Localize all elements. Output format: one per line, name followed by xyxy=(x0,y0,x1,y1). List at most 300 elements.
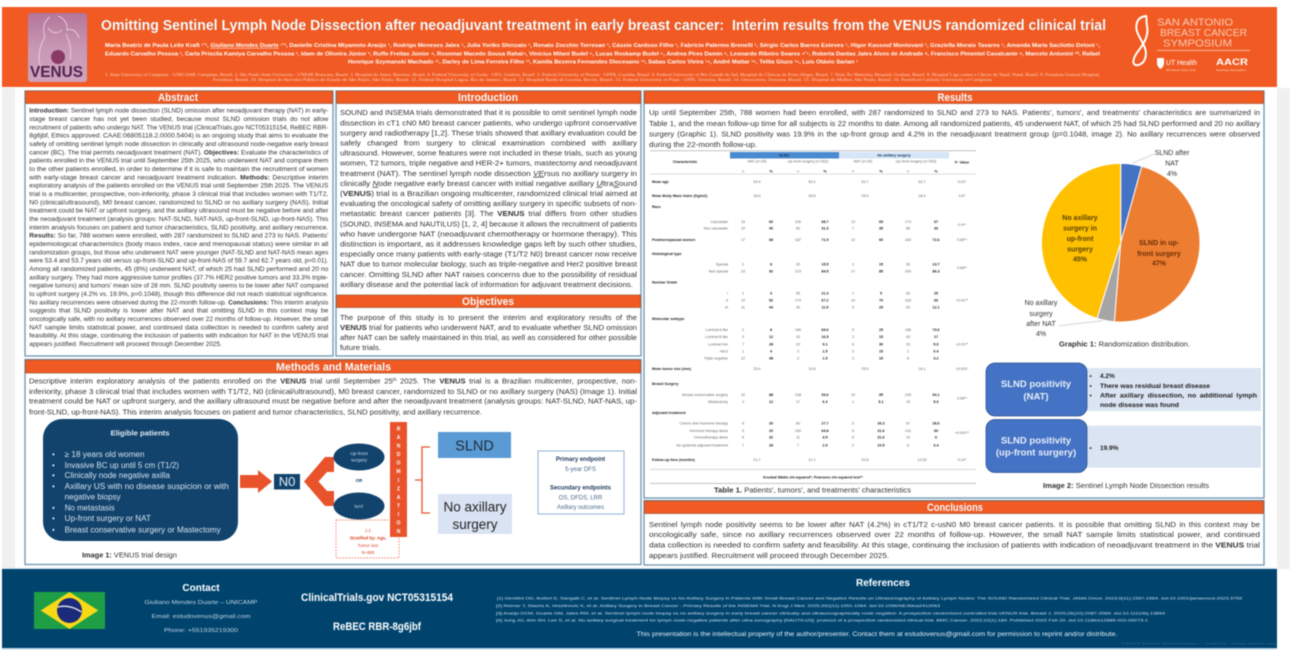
table 1: patient characteristics: 28.8 xyxy=(808,194,816,198)
table 1: patient characteristics: 13.53 xyxy=(917,458,927,462)
table 1: patient characteristics: 12.1 xyxy=(932,306,940,310)
text block: methods: th xyxy=(393,377,397,382)
table 1: patient characteristics: No axillary surgery xyxy=(877,154,912,158)
endpoints box: Primary endpoint xyxy=(556,457,605,463)
pie label: SLND in up-front surgery: front surgery xyxy=(1137,251,1181,258)
table 1: patient characteristics: 10 xyxy=(741,227,745,231)
text block: abstract: cancer (BC). The trial permits neoadjuvant treatment (NAT). Objectives: Evaluate the characteristics of xyxy=(29,149,329,156)
text block: methods: Descriptive interim exploratory analysis of the patients enrolled on the VENUS trial until September 25 xyxy=(29,377,392,386)
table 1: patient characteristics: 15 xyxy=(879,349,883,353)
pie label: no axillary surgery in up-front surgery: up-front xyxy=(1067,236,1094,243)
table 1: patient characteristics: 17 xyxy=(851,269,855,273)
text block: conclusions: data collection is needed to confirm safety and feasibility. At this stage, continuing the inclusion of patients with indication of neoadjuvant treatment in the VENUS trial xyxy=(649,540,1260,550)
table 1: patient characteristics: 53.4 xyxy=(753,180,761,184)
text block: methods: treatment could be NAT or upfront surgery, and the axillary ultrasound must be negative before and after the neoadjuvant treatment (analysis groups: NAT-SLND, NAT-NAS, up- xyxy=(29,397,638,406)
text block: results: during the 22-month follow-up. xyxy=(649,140,757,149)
table 1: patient characteristics: % xyxy=(879,170,883,174)
arm: no axillary surgery: No axillary xyxy=(443,500,507,514)
contact block: Contact xyxy=(182,583,220,594)
eligible patients box: • xyxy=(52,461,55,470)
table 1: patient characteristics: 5 xyxy=(852,306,854,310)
table 1: patient characteristics: 0.14* xyxy=(958,458,967,462)
ellipse: up-front surgery: surgery xyxy=(351,458,368,464)
panel: conclusions xyxy=(644,500,1264,565)
pie label: no axillary surgery in up-front surgery: 45% xyxy=(1073,256,1088,264)
table 1: patient characteristics: 32 xyxy=(769,436,773,440)
text block: abstract: with early-stage breast cancer and neoadjuvant treatment indication. Methods: Descriptive interim xyxy=(28,174,328,181)
logo: VENUS trial xyxy=(28,13,87,82)
table 1: patient characteristics: 31.6 xyxy=(877,436,885,440)
table 1: patient characteristics: 85 xyxy=(879,269,883,273)
table 1: patient characteristics: 20 xyxy=(769,422,773,426)
table 1: patient characteristics: 173 xyxy=(905,220,911,224)
text block: abstract: exploratory analysis of the patients enrolled on the VENUS trial until September 25th 2025. The VENUS xyxy=(29,183,328,190)
logo: San Antonio Breast Cancer Symposium: MD Anderson Cancer Center xyxy=(1166,68,1196,72)
pie label: no axillary surgery in up-front surgery: surgery in xyxy=(1063,226,1097,232)
table 1: patient characteristics: 3.2 xyxy=(933,357,939,361)
SLND positivity after NAT: • xyxy=(1090,383,1092,390)
pie label: no axillary surgery after NAT: 4% xyxy=(1036,331,1046,338)
text block: abstract: Results: So far, 788 women were enrolled, with 287 randomized to SLND and 273 to NAS. Patients' xyxy=(29,233,328,240)
table 1: patient characteristics: Histological type xyxy=(652,252,682,256)
references: This presentation is the intellectual property of the author/presenter. Contact them at estudovenus@gmail.com for permission to reprint and/or distribute. xyxy=(636,632,1118,638)
logo: VENUS trial: VENUS xyxy=(30,64,83,81)
table 1: patient characteristics: 6 xyxy=(852,342,854,346)
table 1: patient characteristics: 35 xyxy=(879,227,883,231)
arm: no axillary surgery xyxy=(438,494,512,534)
table 1: patient characteristics: 67 xyxy=(934,220,938,224)
table 1: patient characteristics: 20.8 xyxy=(861,458,869,462)
table 1: patient characteristics: <0.001** xyxy=(955,431,970,435)
table 1: patient characteristics: 9.1 xyxy=(822,342,828,346)
heading: conclusions: Conclusions xyxy=(927,502,983,514)
table 1: patient characteristics: Caucasian xyxy=(711,220,728,224)
table 1: patient characteristics: <0.001* xyxy=(956,367,969,371)
table 1: patient characteristics: 5.9 xyxy=(933,400,939,404)
eligible patients box: Up-front surgery or NAT xyxy=(65,514,151,523)
text block: conclusions: appears justified. Recruitment will proceed through December 2025. xyxy=(649,551,889,560)
endpoints box: 5-year DFS xyxy=(565,467,596,473)
text block: introduction: dissection in cT1 cN0 M0 breast cancer patients, who undergo upfront conservative xyxy=(340,118,637,127)
table 1: patient characteristics: 65 xyxy=(879,220,883,224)
table 1: patient characteristics: 28.6 xyxy=(932,422,940,426)
table 1: patient characteristics: 29 xyxy=(906,306,910,310)
text block: abstract: No axillary recurrences were observed during the 22-month follow-up. Conclusions: This interim analysis xyxy=(29,299,328,306)
table 1: patient characteristics: Adjuvant treatment xyxy=(652,411,686,415)
header band xyxy=(2,7,1277,87)
table 1: patient characteristics: 6 xyxy=(935,436,937,440)
randomization bar: T xyxy=(397,503,400,509)
text block: objectives xyxy=(340,313,637,352)
table 1: patient characteristics: 4 xyxy=(770,349,773,353)
text block: introduction: distinction is important, as it addresses knowledge gaps left by such other studies, xyxy=(340,240,637,248)
text block: introduction: ultrasound. However, some features were not included in these trials, such as young xyxy=(340,149,637,158)
endpoints box: Axillary outcomes xyxy=(557,505,604,511)
randomization bar: O xyxy=(397,520,401,526)
text block: introduction: axillary disease and the potential lack of information for adjuvant treatment decisions. xyxy=(340,280,633,289)
SLND positivity after up-front surgery: 19.9% xyxy=(1100,445,1119,452)
contact block xyxy=(144,583,258,634)
table 1: patient characteristics: Mean tumor size (mm) xyxy=(652,367,692,371)
table 1: patient characteristics: 8 xyxy=(907,443,909,447)
authors: Henrique Szymanski Machado ¹¹, Darley de Lima Ferreira Filho ¹², Kamila Bezerra Fernandes Diocesano ¹³, Sabas Carlos Vieira ¹⁴, André Mattar ¹⁵, Telita Giuzo ¹⁶, Luís Otávio Sarian ¹ xyxy=(348,60,858,66)
table 1: patient characteristics: 86.3 xyxy=(932,269,940,273)
ellipse: up-front surgery: Up-front xyxy=(350,451,368,457)
table 1: patient characteristics: 174 xyxy=(795,299,801,303)
table 1: patient characteristics: 14 xyxy=(906,436,910,440)
caption: graphic 1: Graphic 1: Randomization distribution. xyxy=(1059,340,1190,348)
pie label: SLND in up-front surgery xyxy=(1137,240,1181,268)
references: [1] Gentilini OD, Botteri E, Sangalli C, et al. Sentinel Lymph Node Biopsy vs No Axillary Surgery in Patients With Small Breast Cancer and Negative Results on Ultrasonography of Axillary Lymph Nodes: The SOUND Randomized Clinical Trial. JAMA Oncol. 2023;9(11):1557-1564. doi:10.1001/jamaoncol.2023.3759 xyxy=(497,596,1243,600)
table 1: patient characteristics: Mean age xyxy=(652,180,669,184)
table 1: patient characteristics: 71.9 xyxy=(821,238,829,242)
table 1: patient characteristics: 68 xyxy=(769,238,773,242)
SLND positivity after NAT xyxy=(986,363,1261,416)
table 1: patient characteristics: 15 xyxy=(879,357,883,361)
text block: abstract: Introduction: Sentinel lymph node dissection (SLND) omission after neoadjuvant therapy (NAT) in early- xyxy=(29,108,328,115)
table 1: patient characteristics: 0.68** xyxy=(957,396,968,400)
logo: San Antonio Breast Cancer Symposium: American Association xyxy=(1216,68,1246,72)
table 1: patient characteristics: % xyxy=(934,170,938,174)
table 1: patient characteristics: Up-front surgery (n=253) xyxy=(896,160,936,164)
pie label: SLND after NAT xyxy=(1155,150,1190,178)
table 1: patient characteristics: 6 xyxy=(852,436,854,440)
table 1: patient characteristics: 15 xyxy=(741,220,745,224)
text block: results: Table 1, and the mean follow-up time for all subjects is 22 months to date. Among all randomized patients, 45 underwent NAT, of which 25 had SLND performed and 20 no axillary xyxy=(649,119,1260,128)
title: Omitting Sentinel Lymph Node Dissection after neoadjuvant treatment in early breast cancer: Interim results from the VENUS randomized clinical trial xyxy=(101,18,1106,34)
contact block: Email: estudovenus@gmail.com xyxy=(152,614,251,620)
table 1: patient characteristics: 1.5 xyxy=(822,357,828,361)
SLND positivity after up-front surgery: (up-front surgery) xyxy=(996,448,1076,459)
table 1: patient characteristics: 28.9 xyxy=(753,194,761,198)
eligible patients box: Invasive BC up until 5 cm (T1/2) xyxy=(65,461,179,470)
table 1: patient characteristics: 5 xyxy=(742,429,744,433)
heading: abstract: Abstract xyxy=(158,92,198,104)
table 1: patient characteristics: 13.7 xyxy=(932,263,940,267)
table 1: patient characteristics: 25 xyxy=(879,328,883,332)
pie label: no axillary surgery in up-front surgery: No axillary xyxy=(1062,215,1098,222)
table 1: patient characteristics: 7 xyxy=(742,443,744,447)
SLND positivity after up-front surgery xyxy=(986,420,1261,472)
text block: abstract: stage breast cancer has not yet been studied, because most SLND omission trials do not allow xyxy=(29,116,329,123)
randomization bar: I xyxy=(398,478,400,484)
text block: introduction: clinically Node negative early breast cancer with initial negative axillary UltraSound xyxy=(340,179,637,188)
text block: abstract: to upfront surgery (4.2% vs. 19.9%, p=0.1048), though this difference did not reach statistical significance. xyxy=(29,291,329,298)
table 1: patient characteristics: Race xyxy=(652,205,661,209)
table 1: patient characteristics: 5 xyxy=(852,422,854,426)
table 1: patient characteristics: 141 xyxy=(905,429,911,433)
endpoints box: Secundary endpoints xyxy=(550,486,612,492)
table 1: patient characteristics: 0.68** xyxy=(957,266,968,270)
pie label: no axillary surgery after NAT: No axillary xyxy=(1025,300,1058,307)
table 1: patient characteristics: Triple negative xyxy=(704,357,728,361)
pie label: no axillary surgery in up-front surgery xyxy=(1062,215,1098,264)
arm: SLND: SLND xyxy=(455,438,494,454)
SLND positivity after NAT: (NAT) xyxy=(1023,392,1049,402)
table 1: patient characteristics: Breast Surgery xyxy=(652,382,679,386)
stratification box: Tumor size xyxy=(357,543,379,548)
text block: conclusions: oncologically safe, since no axillary recurrences observed over 22 months of follow-up. However, the small NAT sample limits statistical power, and continued xyxy=(649,530,1260,539)
randomization bar: M xyxy=(396,469,401,475)
eligible patients box: Clinically node negative axilla xyxy=(65,471,171,480)
N0 box xyxy=(274,474,300,490)
table 1: patient characteristics: 82 xyxy=(796,227,800,231)
table 1: patient characteristics: 4 xyxy=(770,292,773,296)
table 1: patient characteristics: 3.4 xyxy=(933,443,940,447)
text block: abstract: epidemiological characteristics (body mass index, race and menopausal status) were similar in all xyxy=(29,241,328,248)
table 1: patient characteristics: 33 xyxy=(796,263,800,267)
logo: San Antonio Breast Cancer Symposium: SAN ANTONIO xyxy=(1157,18,1233,28)
logo: San Antonio Breast Cancer Symposium: BREAST CANCER xyxy=(1160,28,1247,39)
text block: introduction: safely changed from surgery to clinical examination combined with axillary xyxy=(340,138,637,148)
caption: image 1: Image 1: VENUS trial design xyxy=(82,552,177,560)
table 1: patient characteristics: 55 xyxy=(796,292,800,296)
affiliations xyxy=(105,72,1100,83)
table 1: patient characteristics: 3 xyxy=(852,349,854,353)
randomization bar: D xyxy=(397,452,401,458)
stratification box xyxy=(336,520,399,558)
table 1: patient characteristics: 94.1 xyxy=(932,393,940,397)
randomization bar: R xyxy=(397,426,401,432)
eligible patients box: No metastasis xyxy=(65,504,115,512)
table 1: patient characteristics: 1 xyxy=(852,292,854,296)
table 1: patient characteristics: Chemo and Hormone therapy xyxy=(679,422,728,426)
pie label: no axillary surgery in up-front surgery: surgery xyxy=(1067,246,1093,254)
table 1: patient characteristics: 0.65** xyxy=(957,238,968,242)
table 1: patient characteristics: 72.6 xyxy=(932,238,940,242)
table 1: patient characteristics: I xyxy=(727,292,728,296)
text block: methods: VENUS trial is a Brazilian multicenter, prospective, non- xyxy=(439,377,635,386)
caption: table 1: Table 1. Patients', tumors', and treatments' characteristics xyxy=(714,486,911,494)
table 1: patient characteristics: Her2 xyxy=(720,349,728,353)
SLND positivity after NAT: There was residual breast disease xyxy=(1100,383,1210,390)
logo: San Antonio Breast Cancer Symposium: UT Health xyxy=(1166,58,1197,67)
table 1: patient characteristics: 17 xyxy=(934,335,938,339)
table 1: patient characteristics: 7 xyxy=(742,342,744,346)
pie label: SLND after NAT: 4% xyxy=(1167,171,1177,178)
text block: introduction: who have undergone NAT (neoadjuvant chemotherapy or hormone therapy). This xyxy=(339,229,637,238)
table 1: patient characteristics: 1 xyxy=(907,349,909,353)
randomization bar: A xyxy=(397,435,401,441)
text block: objectives: The purpose of this study is to present the interim and exploratory results of the xyxy=(340,313,637,322)
table 1: patient characteristics: 60 xyxy=(934,429,938,433)
heading: introduction: Introduction xyxy=(458,92,518,104)
text block: abstract: safety of omitting sentinel lymph node dissection in clinically and ultrasound node-negative early breast xyxy=(29,141,329,148)
references: [2] Reimer T, Stachs A, Veselinovic K, et al. Axillary Surgery in Breast Cancer - Primary Results of the INSEMA Trial. N Engl J Med. 2025;392(11):1051-1064. doi:10.1056/NEJMoa2412063 xyxy=(496,603,941,608)
table 1: patient characteristics: 163 xyxy=(905,299,911,303)
table 1: patient characteristics: 0.8* xyxy=(959,194,966,198)
text block: introduction: (VENUS ) trial is a Brazilian ongoing multicenter, randomized clinical trial aimed at xyxy=(340,189,638,198)
table 1: patient characteristics: 100 xyxy=(795,220,801,224)
eligible patients box: • xyxy=(52,482,55,491)
table 1: patient characteristics: 25.4 xyxy=(753,367,761,371)
eligible patients box: • xyxy=(52,514,55,523)
stratification box: 1:1 xyxy=(365,528,372,533)
table 1: patient characteristics: 4.5 xyxy=(822,436,828,440)
table 1: patient characteristics: 35 xyxy=(906,263,910,267)
table 1: patient characteristics: 43 xyxy=(906,335,910,339)
table 1: patient characteristics: 5.1 xyxy=(878,400,884,404)
text block: abstract: treatment could be NAT or upfront surgery, and the axillary ultrasound must be negative before and after xyxy=(29,208,328,215)
table 1: patient characteristics: 16.5 xyxy=(821,335,829,339)
table 1: patient characteristics: 25.5 xyxy=(861,367,869,371)
authors xyxy=(105,43,1101,66)
table 1: patient characteristics: 17 xyxy=(741,238,745,242)
text block: abstract: Among all randomized patients, 45 (8%) underwent NAT, of which 25 had SLND performed and 20 no xyxy=(29,266,329,273)
table 1: patient characteristics: 13 xyxy=(851,220,855,224)
table 1: patient characteristics: Non special xyxy=(709,269,728,273)
heading: objectives: Objectives xyxy=(462,296,514,308)
table 1: patient characteristics: 1 xyxy=(852,400,854,404)
table 1: patient characteristics: 16.1 xyxy=(918,367,926,371)
table 1: patient characteristics: 10.5 xyxy=(877,443,885,447)
randomization bar: Z xyxy=(397,486,400,492)
table 1: patient characteristics: 2.9 xyxy=(822,443,828,447)
SLND positivity after NAT: • xyxy=(1090,392,1092,399)
table 1: patient characteristics: 28 xyxy=(769,342,773,346)
pie label: no axillary surgery after NAT: surgery xyxy=(1029,311,1053,318)
N0 box: N0 xyxy=(279,474,295,489)
table 1: patient characteristics: Luminal B like xyxy=(705,335,728,339)
table 1: patient characteristics: 1.5 xyxy=(822,349,828,353)
table 1: patient characteristics: 3 xyxy=(852,263,854,267)
table 1: patient characteristics: 8 xyxy=(907,357,909,361)
eligible patients box: Eligible patients xyxy=(110,428,170,438)
text block: introduction: metastatic breast cancer patients [3]. The VENUS trial differs from other studies xyxy=(340,209,637,218)
table 1: patient characteristics: III xyxy=(725,306,728,310)
text block: abstract: suggests that SLND positivity is lower after NAT and that omitting SLND in this context may be xyxy=(29,308,329,315)
table 1: patient characteristics: 28.9 xyxy=(861,194,869,198)
table 1: patient characteristics: n xyxy=(797,170,799,174)
text block: abstract: the neoadjuvant treatment (analysis groups: NAT-SLND, NAT-NAS, up-front-SLND, up-front-NAS). This xyxy=(29,216,328,223)
table 1: patient characteristics: Special xyxy=(716,263,728,267)
table 1: patient characteristics: 23 xyxy=(741,269,745,273)
table 1: patient characteristics: Characteristic xyxy=(673,160,697,164)
table 1: patient characteristics: 204 xyxy=(905,269,911,273)
table 1: patient characteristics: 15.5 xyxy=(821,263,829,267)
table 1: patient characteristics: 11 xyxy=(741,306,745,310)
text block: methods xyxy=(29,377,638,416)
panel: methods and materials xyxy=(25,360,641,564)
text block: methods: front-SLND, up-front-NAS). This interim analysis focuses on patient and tumor characteristics, SLND positivity, and axillary recurrence. xyxy=(29,408,482,416)
table 1: patient characteristics: % xyxy=(769,170,773,174)
table 1: patient characteristics: 85 xyxy=(906,227,910,231)
table 1: patient characteristics: 84.5 xyxy=(821,269,829,273)
table 1: patient characteristics: 68.7 xyxy=(821,220,829,224)
table 1: patient characteristics: n xyxy=(907,170,909,174)
table 1: patient characteristics: 0.9** xyxy=(958,223,967,227)
eligible patients box: ≥ 18 years old women xyxy=(65,450,144,459)
text block: abstract: axillary surgery. They had more aggressive tumor profiles (37.7% HER2 positive tumors and 33.3% triple- xyxy=(29,274,328,281)
table 1: patient characteristics: Nuclear Grade xyxy=(652,281,677,285)
heading: methods and materials: Methods and Materials xyxy=(276,362,391,374)
footer band xyxy=(2,568,1277,650)
ellipse: up-front surgery xyxy=(334,444,384,470)
table 1: patient characteristics: 8 xyxy=(770,263,772,267)
affiliations: Fortaleza, Brazil. 10. Hospital do Servidor Público do Estado de São Paulo, São Paulo, Brazil. 11. Federal Hospital Lagoa, Rio de Janeiro, Brazil. 12. Hospital Barão de Lucena, Recife, Brazil. 13. Federal University of Piauí - UFPI, Teresina, Brazil. 14. Oncocentro, Teresina, Brazil. 15. Hospital da Mulher, São Paulo, Brazil. 16. Pontifical Catholic University of Campinas. xyxy=(213,78,993,83)
table 1: patient characteristics: 64.8 xyxy=(821,429,829,433)
table 1: patient characteristics: 30 xyxy=(796,306,800,310)
table 1: patient characteristics: 238 xyxy=(795,393,801,397)
text block: abstract: were 53.4 and 53.7 years old versus up-front-SLND and up-front-NAS of 59.7 and 62.7 years old, p=0.01). xyxy=(28,258,329,265)
table 1: patient characteristics: 20 xyxy=(769,429,773,433)
caption: image 2: Image 2: Sentinel Lymph Node Dissection results xyxy=(1043,483,1210,490)
arrow: eligible to N0 xyxy=(240,470,272,493)
text block: objectives: after NAT can be safely maintained in this trial, as well as considered for other possible xyxy=(340,333,637,342)
table 1: patient characteristics: NAT (n=25) xyxy=(748,160,766,164)
logo: San Antonio Breast Cancer Symposium: AACR xyxy=(1216,57,1249,67)
table 1: patient characteristics: Molecular subtype xyxy=(652,317,684,321)
endpoints box xyxy=(538,451,624,514)
table 1: patient characteristics: Mastectomy xyxy=(708,400,728,404)
table 1: patient characteristics: 0.01* xyxy=(958,180,967,184)
table 1: patient characteristics: 48 xyxy=(769,357,773,361)
table 1: patient characteristics: 15 xyxy=(906,342,910,346)
text block: abstract: to the other patients enrolled, in order to determine if it is safe to maintain the recruitment of women xyxy=(29,166,329,173)
table 1: patient characteristics: 3 xyxy=(742,335,744,339)
text block: abstract: NAT sample limits statistical power, and continued data collection is needed to confirm safety and xyxy=(29,324,329,331)
references: [3] Araújo DCM, Duarte GM, Jales RM, et al. Sentinel lymph node biopsy vs no axillary surgery in early breast cancer clinically and ultrasonographically node negative: A prospective randomized controlled trial-VENUS trial. Breast J. 2020;26(10):2087-2089. doi:10.1111/tbj.13894 xyxy=(496,610,1166,616)
table 1: patient characteristics: 23 xyxy=(796,342,800,346)
panel: introduction xyxy=(336,91,641,356)
SLND positivity after NAT: SLND positivity xyxy=(1001,379,1072,390)
text block: introduction: (SOUND, INSEMA and NAUTILUS) [1, 2, 4] because it allows the recruitment of patients xyxy=(340,219,637,228)
text block: abstract: randomization groups, but those who underwent NAT were younger (NAT-SLND and NAT-NAS mean ages xyxy=(29,249,328,256)
table 1: patient characteristics: 25 xyxy=(934,292,938,296)
table 1: patient characteristics: 15 xyxy=(879,335,883,339)
pie label: SLND in up-front surgery: 47% xyxy=(1152,260,1167,268)
trial registrations xyxy=(301,592,454,633)
table 1: patient characteristics: 2 xyxy=(742,328,744,332)
table 1: patient characteristics: 7 xyxy=(797,443,799,447)
affiliations: 1. State University of Campinas - UNICAMP, Campinas, Brazil. 2. São Paulo State University - UNESP, Botucatu, Brazil. 3. Hospital do Amor, Barretos, Brazil. 4. Federal University of Goiás - UFG, Goiânia, Brazil. 5. Federal University of Paraná - UFPR, Curitiba, Brazil. 6. Federal University of Rio Grande do Sul, Hospital de Clínicas de Porto Alegre, Brazil. 7. Dom Ão Maternity Hospital, Goiânia, Brazil. 8. Hospital Liga contra o Câncer de Natal, Natal, Brazil. 9. Fortaleza General Hospital, xyxy=(105,72,1100,78)
table 1: patient characteristics: 60 xyxy=(769,220,773,224)
text block: introduction: evaluating the oncological safety of omitting axillary surgery in specific subsets of non- xyxy=(340,199,638,208)
text block: abstract: trial is a multicenter, prospective, non-inferiority, phase 3 clinical trial that includes women with T1/T2, xyxy=(29,191,329,198)
table 1: patient characteristics: <0.01** xyxy=(956,342,969,346)
endpoints box: OS, DFDS, LRR xyxy=(559,495,603,501)
table 1: patient characteristics: Follow-up time (months) xyxy=(652,458,696,462)
table 1: patient characteristics: 180 xyxy=(795,328,801,332)
table 1: patient characteristics: 19 xyxy=(851,393,855,397)
table 1: patient characteristics: 40 xyxy=(769,227,773,231)
table 1: patient characteristics: 3 xyxy=(797,349,799,353)
table 1: patient characteristics: Mean Body Mass Index (Kg/m2) xyxy=(652,194,708,198)
eligible patients box: Axillary US with no disease suspicion or with xyxy=(65,482,229,491)
text block: methods: inferiority, phase 3 clinical trial that includes women with T1/T2, N0 (clinical/ultrasound), M0 breast cancer, randomized to SLND or no axillary surgery (NAS) (Image 1). Initial xyxy=(29,387,637,396)
table 1: patient characteristics: 12 xyxy=(769,335,773,339)
label: or: OR xyxy=(356,478,363,483)
randomization bar: O xyxy=(397,461,401,467)
SLND positivity after up-front surgery: • xyxy=(1090,445,1092,452)
randomization bar: N xyxy=(397,529,401,535)
randomization bar: I xyxy=(398,512,400,518)
pie label: SLND after NAT: NAT xyxy=(1165,160,1179,168)
table 1: patient characteristics: 15 xyxy=(879,263,883,267)
eligible patients box: Breast conservative surgery or Mastectomy xyxy=(65,526,221,534)
table 1: patient characteristics: 53.7 xyxy=(861,180,869,184)
table 1: patient characteristics: 2 xyxy=(742,263,744,267)
table 1: patient characteristics: 7 xyxy=(852,227,854,231)
table 1: patient characteristics: 95 xyxy=(879,393,883,397)
table 1: patient characteristics: Postmenopausal women xyxy=(652,238,696,242)
table 1: patient characteristics: 92 xyxy=(769,269,773,273)
table 1: patient characteristics: 60 xyxy=(879,238,883,242)
text block: introduction: SOUND and INSEMA trials demonstrated that it is possible to omit sentinel lymph node xyxy=(340,108,637,117)
table 1: patient characteristics: 2 xyxy=(852,443,854,447)
pie label: SLND after NAT: SLND after xyxy=(1155,150,1190,157)
pie label: SLND in up-front surgery: SLND in up- xyxy=(1139,240,1180,247)
